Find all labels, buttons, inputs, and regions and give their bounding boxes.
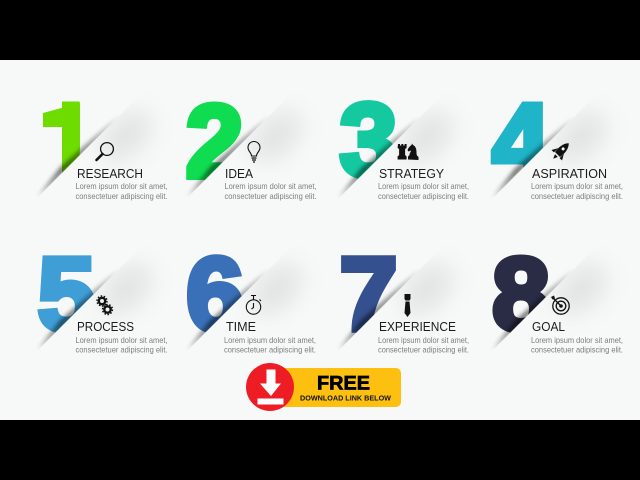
heading: experience: EXPERIENCE [379,320,456,334]
item 2: idea [186,102,316,200]
numeral 5 [37,255,152,348]
numeral 8: 8 [492,237,550,353]
text: process body [76,336,168,354]
text: process body: Lorem ipsum dolor sit amet, [76,336,168,345]
numeral 7 [340,255,453,348]
text: strategy body [378,182,469,201]
numeral 4: 4 [492,83,550,199]
text: aspiration body [531,182,623,201]
item 4: aspiration [490,102,622,200]
heading: research: RESEARCH [77,167,143,181]
text: experience body [378,336,469,354]
text: strategy body: Lorem ipsum dolor sit amet, [378,182,469,191]
icon: magnifier [96,143,113,160]
icon: red download circle [246,363,294,411]
heading: aspiration: ASPIRATION [532,167,607,181]
text: download link below: DOWNLOAD LINK BELOW [300,394,391,402]
item 8: goal [492,254,622,354]
text: experience body: consectetuer adipiscing elit. [378,346,469,354]
numeral 3 [338,100,453,196]
text: research body: consectetuer adipiscing elit. [76,192,168,201]
text: goal body: consectetuer adipiscing elit. [531,346,623,354]
heading: idea: IDEA [225,167,254,181]
heading: time: TIME [226,320,256,334]
heading: process: PROCESS [77,320,134,334]
icon: necktie [404,294,410,317]
text: experience body: Lorem ipsum dolor sit amet, [378,336,469,345]
text: time body [224,336,316,354]
text: research body [76,182,168,201]
numeral 3: 3 [340,83,397,199]
numeral 2 [186,102,302,196]
background [0,60,640,420]
item 3: strategy [338,100,468,200]
heading: goal: GOAL [532,320,565,334]
item 7: experience [340,255,468,354]
numeral 8 [492,254,607,348]
text: time body: Lorem ipsum dolor sit amet, [224,336,316,345]
text: process body: consectetuer adipiscing elit. [76,346,168,354]
text: idea body [224,182,316,201]
numeral 1: 1 [38,83,96,199]
text: goal body: Lorem ipsum dolor sit amet, [531,336,623,345]
text: strategy body: consectetuer adipiscing elit. [378,192,469,201]
numeral 7: 7 [340,237,397,353]
text: research body: Lorem ipsum dolor sit amet, [76,182,168,191]
item 5: process [37,255,167,354]
numeral 4 [490,102,607,196]
icon: light bulb [248,142,260,162]
icon: gears [97,296,112,314]
icon: target [551,296,569,314]
numeral 6: 6 [186,237,244,353]
numeral 1 [43,102,80,173]
text: aspiration body: Lorem ipsum dolor sit amet, [531,182,623,191]
icon: chess pieces [398,144,418,160]
icon: rocket [548,138,574,164]
button: yellow label [270,368,401,407]
text: time body: consectetuer adipiscing elit. [224,346,316,354]
text: free: FREE [317,374,370,394]
download badge [246,363,401,411]
text: aspiration body: consectetuer adipiscing elit. [531,192,623,201]
text: goal body [531,336,623,354]
numeral 5: 5 [38,237,95,353]
item 6: time [186,254,316,354]
text: idea body: Lorem ipsum dolor sit amet, [224,182,316,191]
item 1: research [38,102,167,200]
icon: stopwatch [246,296,261,314]
numeral 6 [186,254,302,348]
text: idea body: consectetuer adipiscing elit. [224,192,316,201]
numeral 2: 2 [186,84,243,200]
heading: strategy: STRATEGY [379,167,445,181]
